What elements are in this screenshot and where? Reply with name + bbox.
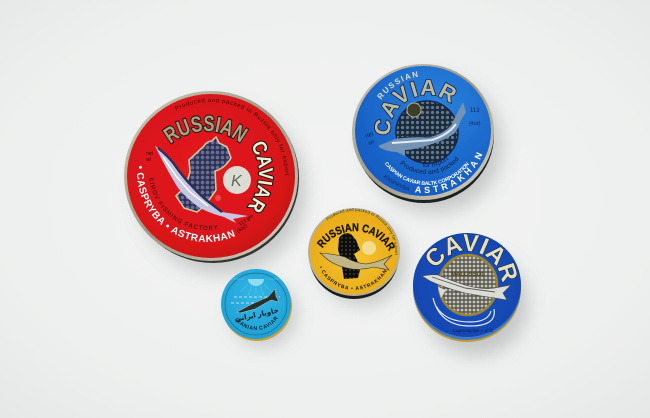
blue tin weights: (4oz) xyxy=(469,121,481,127)
tin: red Russian Caviar xyxy=(124,91,299,263)
red tin factory line: KIROV FISHING FACTORY xyxy=(149,178,218,230)
tin: blue Caviar with silver sturgeon xyxy=(413,233,521,342)
blue tin sturgeon xyxy=(422,275,511,300)
turquoise tin sturgeon xyxy=(237,289,279,313)
red tin roe illustration xyxy=(176,137,231,212)
turquoise tin heading: IRANIAN CAVIAR xyxy=(235,316,278,330)
blue tin sturgeon xyxy=(378,102,466,156)
shadows under tins xyxy=(138,77,528,356)
tin: yellow Russian Caviar xyxy=(308,208,400,299)
red tin net weight: (4oz) xyxy=(236,223,249,235)
red tin sturgeon xyxy=(155,146,248,223)
red tin net weight: 113 gm xyxy=(238,213,255,228)
turquoise tin Persian text: خاويار ايراني xyxy=(234,307,279,324)
red tin heading: RUSSIAN: RUSSIAN xyxy=(162,114,250,144)
red tin net weight: net xyxy=(146,151,154,157)
blue tin weights: wt xyxy=(367,139,376,147)
blue tin roe medallion xyxy=(439,255,497,315)
yellow tin sturgeon xyxy=(320,253,392,270)
blue tin city line: ASTRAKHAN xyxy=(414,152,482,194)
blue tin storage note: Lagerung Bei + 3° C xyxy=(453,328,494,333)
red tin maker seal: K xyxy=(231,173,243,190)
red tin maker line: • CASPRYBA • ASTRAKHAN xyxy=(137,166,235,242)
tin: blue Russian Caviar Astrakhan xyxy=(352,64,494,203)
yellow tin seal xyxy=(362,241,376,255)
blue tin export line 2: for export xyxy=(422,156,448,167)
blue tin weights: net xyxy=(365,131,375,140)
red tin maker seal xyxy=(223,166,251,194)
red tin heading: CAVIAR: CAVIAR xyxy=(246,140,274,214)
tin: turquoise Iranian Caviar xyxy=(221,269,292,341)
red tin top slogan: Produced and packed in Russia only for export xyxy=(174,98,289,176)
blue tin heading: CAVIAR: CAVIAR xyxy=(426,233,518,284)
yellow tin heading: RUSSIAN CAVIAR xyxy=(316,223,395,252)
blue tin company line: CASPIAN CAVIAR BALTK CORPORATION xyxy=(385,162,469,185)
blue tin heading: CAVIAR: CAVIAR xyxy=(374,79,456,136)
red tin net weight: wt xyxy=(146,157,152,163)
blue tin maker small: KASPRYBA xyxy=(384,174,409,191)
turquoise tin water lines xyxy=(231,297,280,303)
blue tin seal xyxy=(407,103,421,117)
blue tin export line: Produced and packed xyxy=(400,156,459,174)
red tin net weight xyxy=(146,151,255,235)
yellow tin top slogan: Produced and packed in Russia only for export xyxy=(326,208,398,255)
blue tin weights: 113 xyxy=(470,108,480,114)
blue tin white wave lines xyxy=(433,298,494,326)
blue tin roe label: MALOSSOL xyxy=(451,272,485,278)
turquoise tin sun xyxy=(232,279,280,295)
yellow tin maker line: • CASPRYBA • ASTRAKHAN xyxy=(320,266,387,290)
red tin glint xyxy=(215,195,221,201)
blue tin weights xyxy=(365,108,481,147)
yellow tin roe xyxy=(338,233,360,279)
blue tin roe medallion xyxy=(396,101,458,163)
blue tin label: RUSSIAN: RUSSIAN xyxy=(377,71,418,100)
